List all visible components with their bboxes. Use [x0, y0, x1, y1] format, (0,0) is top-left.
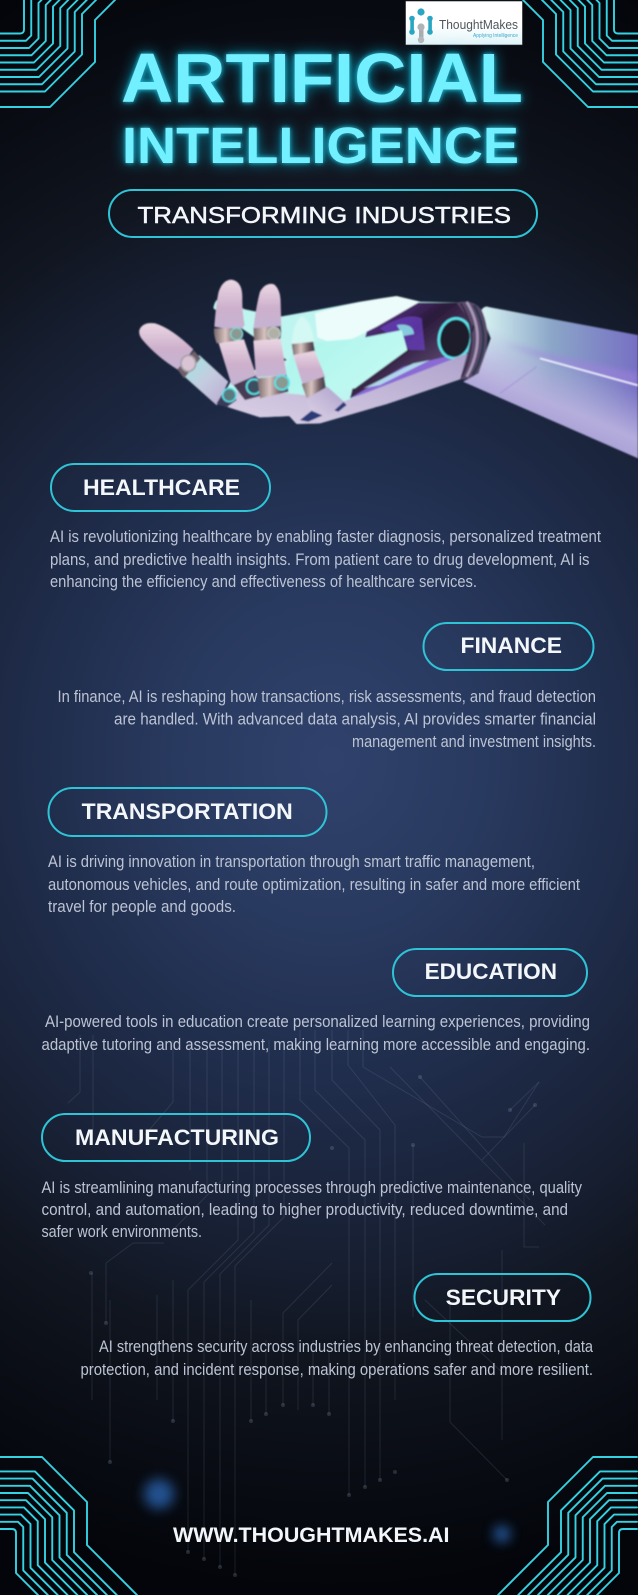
heading: security	[414, 1274, 590, 1321]
logo wordmark: ThoughtMakes	[439, 17, 518, 32]
finger 2	[214, 280, 263, 400]
text: healthcare: plans, and predictive health insights. From patient care to drug development, AI is	[50, 551, 590, 569]
knuckle dark accents	[300, 402, 347, 422]
panel: healthcare	[50, 464, 601, 591]
subtitle pill	[109, 190, 537, 237]
title: INTELLIGENCE	[122, 117, 519, 174]
circuit corner top right	[523, 0, 638, 107]
chrome wrist section	[350, 303, 475, 398]
heading: manufacturing	[42, 1114, 310, 1161]
logo tagline: Applying Intelligence	[473, 33, 518, 39]
text: healthcare: enhancing the efficiency and effectiveness of healthcare services.	[50, 573, 477, 591]
icon: logo mark	[409, 8, 433, 43]
subtitle pill: TRANSFORMING INDUSTRIES	[138, 202, 511, 228]
circuit corner bottom left	[0, 1457, 137, 1595]
circuit corner top left	[0, 0, 115, 107]
back of hand	[315, 296, 420, 343]
background circuit pattern	[68, 1030, 545, 1577]
heading: transportation: TRANSPORTATION	[82, 799, 293, 824]
panel: security	[80, 1274, 594, 1379]
panel: education	[42, 949, 590, 1054]
panel: manufacturing	[42, 1114, 583, 1241]
heading: education	[393, 949, 587, 996]
text: manufacturing: AI is streamlining manufacturing processes through predictive maintenance, quality	[42, 1179, 583, 1197]
text: healthcare: AI is revolutionizing healthcare by enabling faster diagnosis, personalized treatment	[50, 528, 601, 546]
text: education	[42, 1013, 590, 1054]
logo	[406, 1, 522, 45]
finger 3	[253, 284, 289, 398]
forearm	[463, 307, 638, 458]
palm plate	[218, 353, 467, 424]
wrist ring	[457, 301, 487, 379]
glow orb right	[494, 1526, 510, 1542]
heading: finance: FINANCE	[460, 633, 562, 658]
heading: finance	[424, 623, 594, 670]
title	[121, 39, 523, 174]
heading: transportation	[48, 788, 326, 836]
text: finance: are handled. With advanced data analysis, AI provides smarter financial	[114, 710, 596, 728]
text: education: AI-powered tools in education create personalized learning experiences, providing	[45, 1013, 590, 1031]
text: security: protection, and incident response, making operations safer and more resilient.	[80, 1361, 593, 1379]
text: transportation: autonomous vehicles, and route optimization, resulting in safer and more efficient	[48, 876, 580, 894]
robot hand illustration	[139, 280, 638, 458]
heading: security: SECURITY	[446, 1285, 561, 1310]
title: ARTIFICIAL	[121, 39, 523, 117]
heading: healthcare: HEALTHCARE	[83, 475, 240, 500]
text: security	[80, 1338, 594, 1379]
hand base silhouette	[213, 296, 467, 424]
heading: manufacturing: MANUFACTURING	[75, 1125, 279, 1150]
palm	[283, 330, 407, 393]
text: healthcare	[50, 528, 601, 591]
text: education: adaptive tutoring and assessment, making learning more accessible and engaging.	[42, 1036, 590, 1054]
footer url: WWW.THOUGHTMAKES.AI	[173, 1524, 450, 1547]
finger 1	[139, 323, 237, 407]
text: manufacturing: safer work environments.	[42, 1223, 202, 1241]
heading: education: EDUCATION	[425, 959, 557, 984]
panel: finance	[58, 623, 596, 751]
text: security: AI strengthens security across industries by enhancing threat detection, data	[99, 1338, 594, 1356]
text: transportation	[48, 853, 580, 916]
text: finance: management and investment insights.	[352, 733, 596, 751]
text: transportation: AI is driving innovation in transportation through smart traffic management,	[48, 853, 535, 871]
panel: transportation	[48, 788, 580, 916]
finger 4	[292, 316, 344, 417]
glow orb left	[144, 1479, 174, 1509]
text: manufacturing: control, and automation, leading to higher productivity, reduced downtime, and	[42, 1201, 568, 1219]
text: finance	[58, 688, 596, 751]
heading: healthcare	[51, 464, 270, 511]
circuit corner bottom right	[498, 1457, 637, 1595]
text: manufacturing	[42, 1179, 583, 1241]
text: transportation: travel for people and goods.	[48, 898, 236, 916]
